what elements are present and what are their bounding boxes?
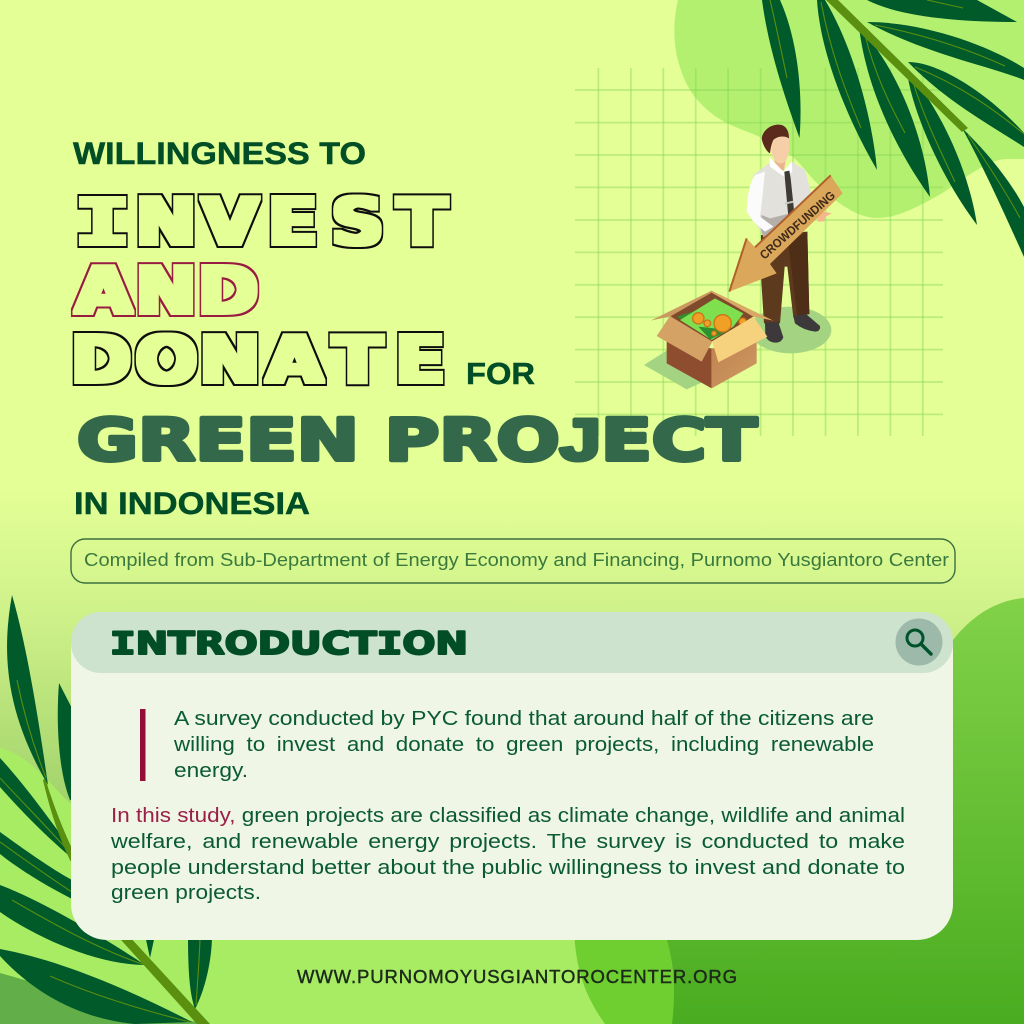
collar [769,157,792,177]
heading: and: AND [75,255,258,329]
study text: people understand better about the public willingness to invest and donate to [111,856,905,879]
palm leaves: top right [762,0,1024,257]
card body [71,612,953,940]
shadow under man [750,307,831,353]
blob: bottom centre [574,930,680,1024]
illustration: man and box with crowdfunding arrow [644,125,843,389]
heading: donate: DONATE [71,324,445,398]
panel: introduction [71,612,953,940]
study text: green projects. [111,881,261,904]
shoes [765,314,820,343]
heading: willingness to: WILLINGNESS TO [73,135,366,171]
survey text: willing to invest and donate to green projects, including renewable [173,733,874,756]
blob: bottom left and centre [0,748,620,1024]
shirt [747,162,812,235]
tie [784,171,794,217]
heading: for: FOR [466,356,535,391]
trousers [761,232,809,323]
box front [657,316,767,388]
shadow under box [644,351,715,389]
arrow sign [729,175,843,292]
accent bar [140,709,146,781]
blob: bottom left dark [0,973,210,1024]
head [762,125,789,163]
heading: green project: GREEN PRO JECT [77,406,758,474]
heading: invest: NVEST [136,186,447,260]
study text: In this study, green projects are classified as climate change, wildlife and animal [111,804,905,827]
icon: magnifying glass [896,618,942,666]
palm leaves: bottom left [0,595,212,1024]
grid [575,68,943,436]
hand [817,212,832,222]
blob: top right [674,0,1024,218]
money in box [677,298,746,340]
arrow label: CROWDFUNDING [757,188,838,262]
study text: welfare, and renewable energy projects. The survey is conducted to make [110,830,905,853]
source box [71,539,955,583]
blob: bottom right [667,598,1024,1024]
source box: Compiled from Sub-Department of Energy Economy and Financing, Purnomo Yusgiantoro Center [84,549,949,570]
survey text [173,707,874,782]
survey text: A survey conducted by PYC found that around half of the citizens are [174,707,874,730]
neck [774,157,786,171]
card header [71,612,953,673]
website url: WWW.PURNOMOYUSGIANTOROCENTER.ORG [297,966,737,987]
coins [693,313,746,336]
box back flaps and interior [651,291,773,342]
study text [110,804,905,904]
survey text: energy. [174,759,248,782]
heading: in indonesia: IN INDONESIA [74,485,310,521]
heading: invest: I [75,187,129,266]
man upper body [747,125,812,237]
introduction title: INTRODUCT ION [110,626,468,665]
